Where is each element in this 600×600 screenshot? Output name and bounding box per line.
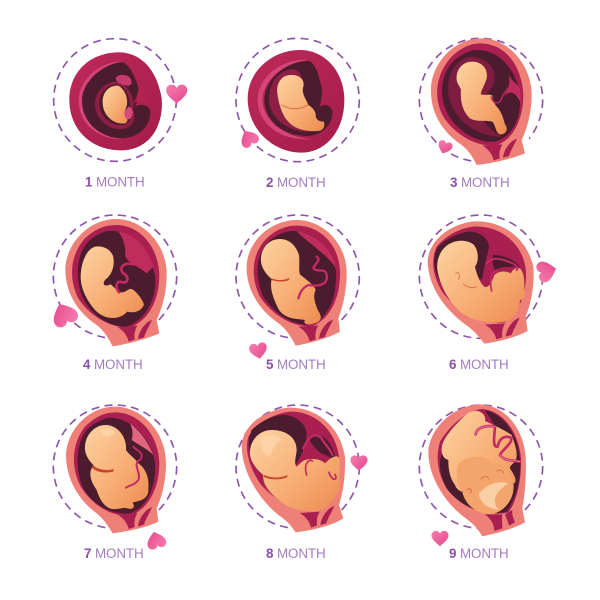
- panel: month 2: [236, 38, 359, 190]
- panel: month 5: [236, 215, 359, 372]
- illustration: month 7 womb: [53, 405, 177, 533]
- illustration: month 9 womb: [419, 404, 543, 536]
- panel: month 8: [236, 405, 368, 561]
- heart: month 3: [436, 139, 454, 156]
- label: 9 month: 9 MONTH: [449, 546, 509, 561]
- heart: month 6: [535, 258, 559, 284]
- illustration: month 6 womb: [419, 215, 543, 344]
- panel: month 6: [419, 215, 559, 372]
- illustration: month 4 womb: [53, 215, 177, 346]
- heart: month 2: [237, 126, 261, 150]
- heart: month 9: [432, 531, 448, 546]
- label: 5 month: 5 MONTH: [266, 357, 326, 372]
- heart: month 8: [350, 455, 368, 470]
- heart: month 5: [248, 342, 269, 360]
- panel: month 1: [54, 39, 187, 190]
- illustration: month 1 womb: [54, 39, 176, 161]
- heart: month 1: [166, 85, 187, 103]
- label: 1 month: 1 MONTH: [85, 174, 145, 190]
- heart: month 4: [48, 299, 80, 330]
- illustration: month 8 womb: [236, 405, 359, 532]
- illustration: month 2 womb: [236, 38, 359, 162]
- panel: month 4: [48, 215, 177, 372]
- illustration: month 3 womb: [419, 38, 543, 165]
- illustration: month 5 womb: [236, 215, 359, 346]
- label: 4 month: 4 MONTH: [83, 357, 143, 372]
- label: 7 month: 7 MONTH: [84, 546, 144, 561]
- heart: month 7: [145, 529, 167, 551]
- label: 8 month: 8 MONTH: [266, 546, 326, 561]
- label: 6 month: 6 MONTH: [449, 357, 509, 372]
- label: 3 month: 3 MONTH: [450, 175, 510, 190]
- panel: month 7: [53, 405, 177, 561]
- label: 2 month: 2 MONTH: [266, 175, 326, 190]
- panel: month 3: [419, 38, 543, 190]
- panel: month 9: [419, 404, 543, 561]
